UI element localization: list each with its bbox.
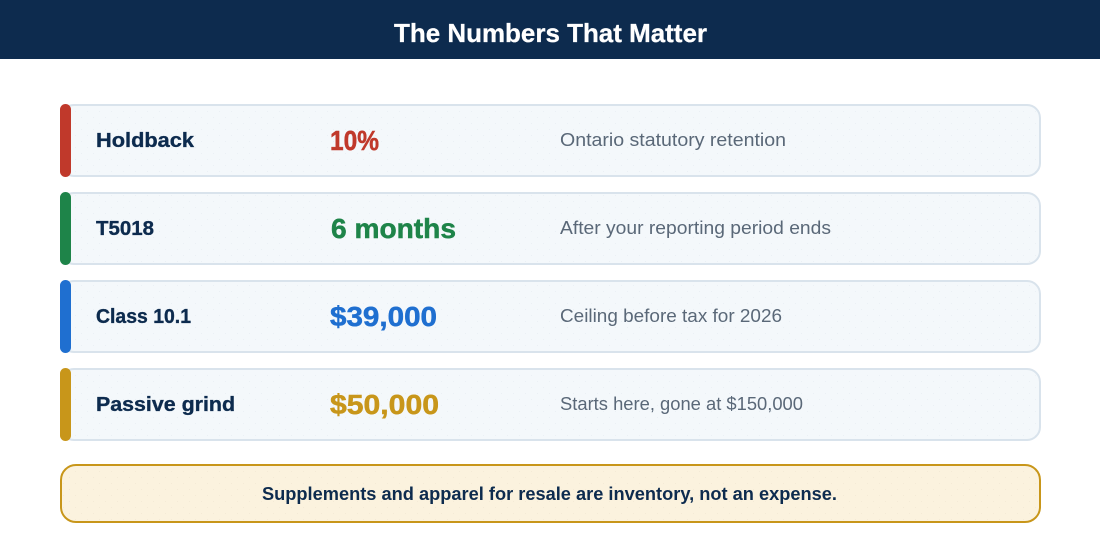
value: 6 months: 6 months (331, 213, 456, 244)
callout text: Supplements and apparel for resale are inventory, not an expense. (262, 484, 837, 504)
accent bar: red (60, 104, 71, 177)
description: After your reporting period ends: After your reporting period ends (560, 218, 831, 238)
title: The Numbers That Matter (394, 18, 707, 48)
header banner (0, 0, 1100, 59)
label: T5018: T5018 (96, 218, 154, 240)
accent bar: blue (60, 280, 71, 353)
row: Holdback (60, 104, 1040, 177)
row: Passive grind (60, 368, 1040, 441)
description: Ontario statutory retention: Ontario statutory retention (560, 130, 786, 150)
value: 10%: 10% (330, 125, 379, 156)
accent bar: gold (60, 368, 71, 441)
row: Class 10.1 (60, 280, 1040, 353)
description: Starts here, gone at $150,000: Starts here, gone at $150,000 (560, 394, 803, 414)
value: $39,000: $39,000 (330, 301, 437, 332)
label: Class 10.1: Class 10.1 (96, 306, 191, 328)
label: Holdback: Holdback (96, 130, 195, 152)
label: Passive grind: Passive grind (96, 394, 235, 416)
value: $50,000: $50,000 (330, 389, 439, 420)
callout: inventory note (61, 465, 1040, 522)
row: T5018 (60, 192, 1040, 265)
accent bar: green (60, 192, 71, 265)
description: Ceiling before tax for 2026: Ceiling before tax for 2026 (560, 306, 782, 326)
